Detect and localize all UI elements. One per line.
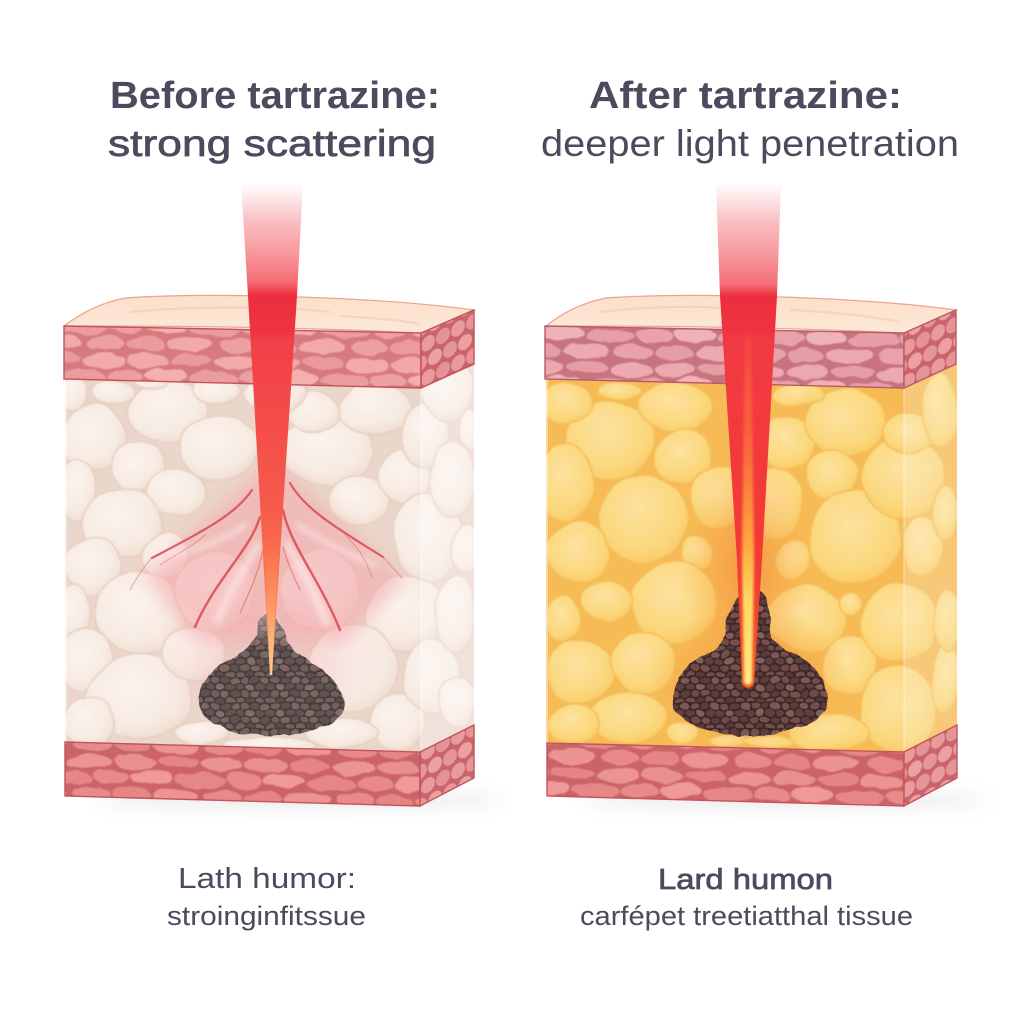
tumor neck fade [256,610,288,648]
panel: before tartrazine tissue block [50,183,505,817]
title: after tartrazine [541,75,959,164]
beam glow on cells [694,478,800,634]
scatter haze [142,466,407,690]
laser beam [716,183,781,688]
block shadow [580,791,990,809]
caption: right: Lard humon [658,864,833,896]
fat layer with yellow adipocytes [538,360,961,760]
beam bright core [742,325,754,685]
block shadow [95,791,505,809]
top skin surface [546,295,956,333]
fat layer with pale adipocytes [56,359,481,760]
feathered haze streaks [170,525,375,622]
caption: right [580,864,913,931]
lower skin band [64,724,475,808]
lower skin band [546,724,958,808]
caption: left [167,863,366,931]
upper skin band [544,308,957,389]
title: before tartrazine: strong scattering [108,123,436,164]
right side face tint [421,364,474,753]
tumor [198,612,344,735]
scattered light veins [130,483,402,630]
beam tip glow [264,540,279,675]
upper skin band [63,308,475,390]
caption: left: Lath humor: [178,863,356,895]
top skin surface [64,295,474,333]
title: before tartrazine: Before tartrazine: [110,75,440,117]
laser beam [241,183,303,675]
caption: right: carfépet treetiatthal tissue [580,901,913,931]
panel: after tartrazine tissue block [544,188,965,811]
right side face tint [904,364,957,753]
title: before tartrazine [108,75,440,164]
title: after tartrazine: After tartrazine: [589,75,902,117]
caption: left: stroinginfitssue [167,901,366,931]
tumor glow [685,625,833,743]
tumor [673,589,828,735]
title: after tartrazine: deeper light penetration [541,123,959,164]
